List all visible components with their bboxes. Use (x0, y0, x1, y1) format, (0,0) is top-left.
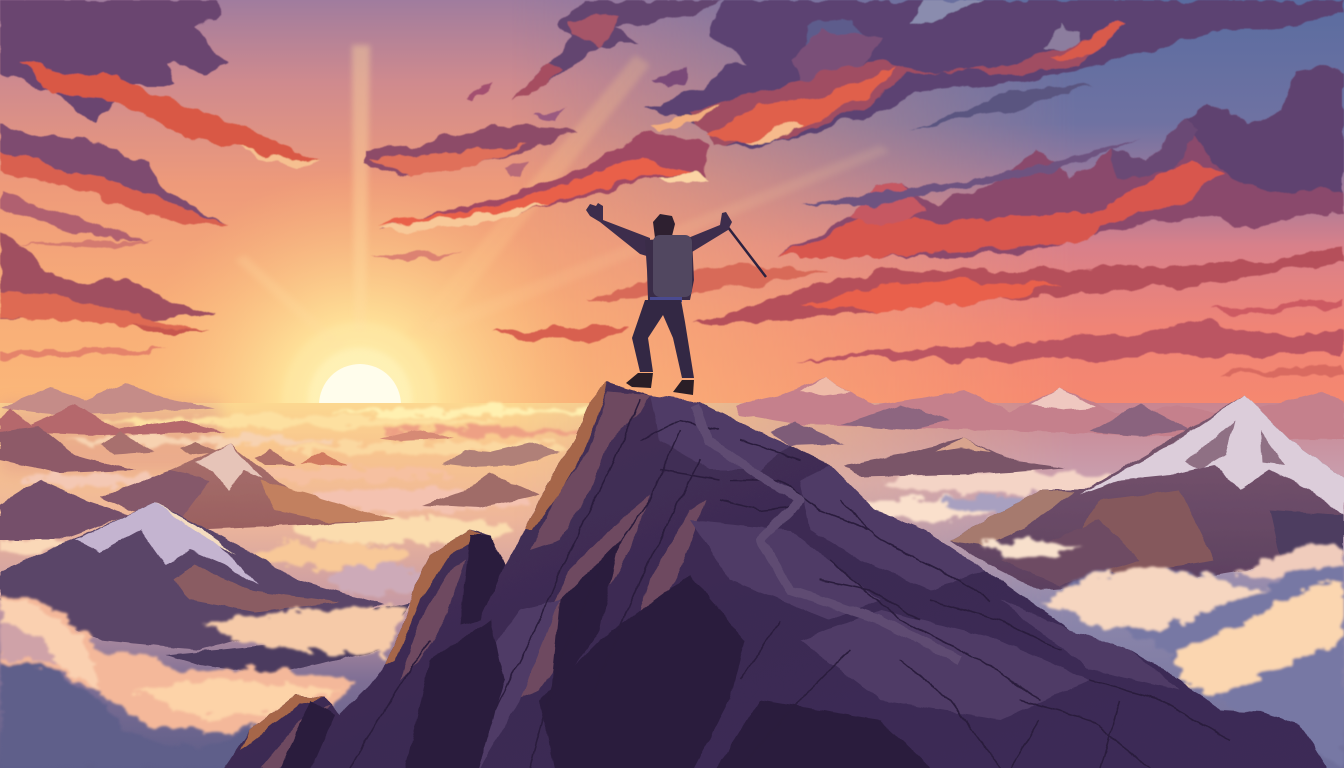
rock cracks (350, 400, 1230, 768)
climbing belt (650, 297, 682, 302)
trail on peak (695, 405, 960, 660)
legs (632, 300, 694, 378)
foreground clouds right (980, 540, 1344, 768)
arms and hands (586, 203, 732, 257)
foreground clouds left (0, 596, 410, 768)
sun (319, 364, 401, 405)
hiker silhouette (586, 203, 766, 395)
sunlit ridge edges (240, 382, 606, 750)
shadowed rock faces (270, 535, 960, 768)
head (653, 214, 675, 238)
sun glow and rays (100, 45, 890, 478)
mid-tone rock faces (440, 395, 1180, 768)
clouds: upper centre (365, 0, 1344, 232)
left mountains (0, 426, 540, 675)
trekking pole (727, 226, 766, 277)
distant mountains left (0, 383, 560, 467)
clouds: right side (0, 67, 1344, 375)
backpack (653, 235, 692, 297)
sea of clouds (0, 403, 1344, 768)
sky background (0, 0, 1344, 410)
distant mountains right (735, 378, 1344, 477)
main rocky peak (205, 382, 1344, 768)
clouds: upper left (0, 0, 322, 332)
warm rock strips (260, 392, 705, 768)
torso (645, 238, 694, 300)
right mountain (950, 395, 1344, 590)
cloud layer bands (0, 408, 1120, 596)
boots (626, 373, 694, 395)
